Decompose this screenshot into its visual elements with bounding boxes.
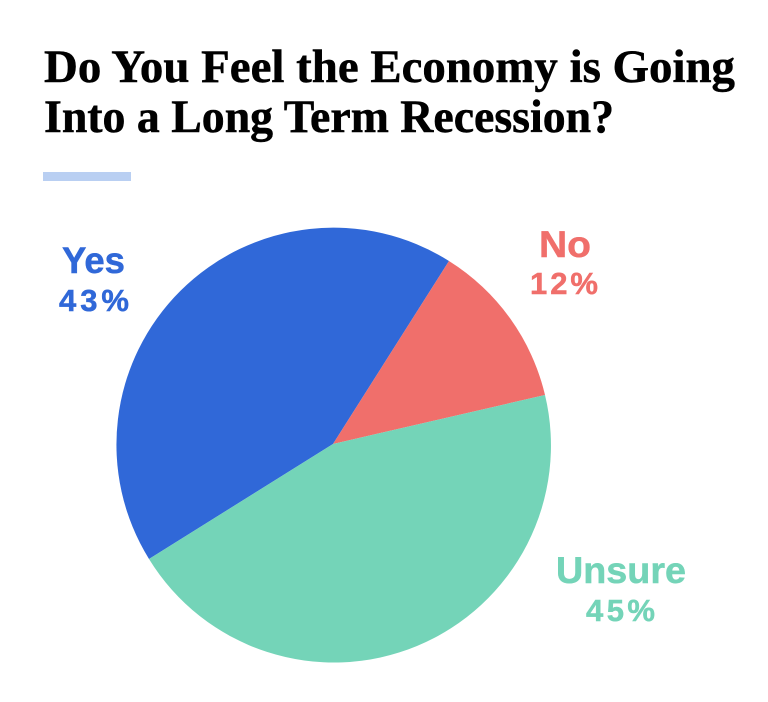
title: Do You Feel the Economy is Going	[44, 41, 735, 93]
pie chart	[116, 228, 551, 663]
label: No 12%	[530, 224, 598, 301]
slice: No 12%	[333, 261, 545, 444]
label: Yes 43%: 43%	[59, 283, 129, 318]
label: Unsure 45%: 45%	[586, 593, 655, 628]
slice: Yes 43%	[116, 228, 449, 559]
accent bar	[43, 172, 131, 181]
label: Unsure 45%: Unsure	[556, 550, 686, 591]
title: Into a Long Term Recession?	[44, 91, 614, 143]
label: Unsure 45%	[556, 550, 686, 628]
label: No 12%: No	[539, 224, 591, 265]
title	[44, 41, 735, 143]
label: Yes 43%	[59, 240, 129, 318]
label: Yes 43%: Yes	[62, 240, 125, 281]
slice: Unsure 45%	[149, 395, 551, 663]
label: No 12%: 12%	[530, 266, 598, 301]
